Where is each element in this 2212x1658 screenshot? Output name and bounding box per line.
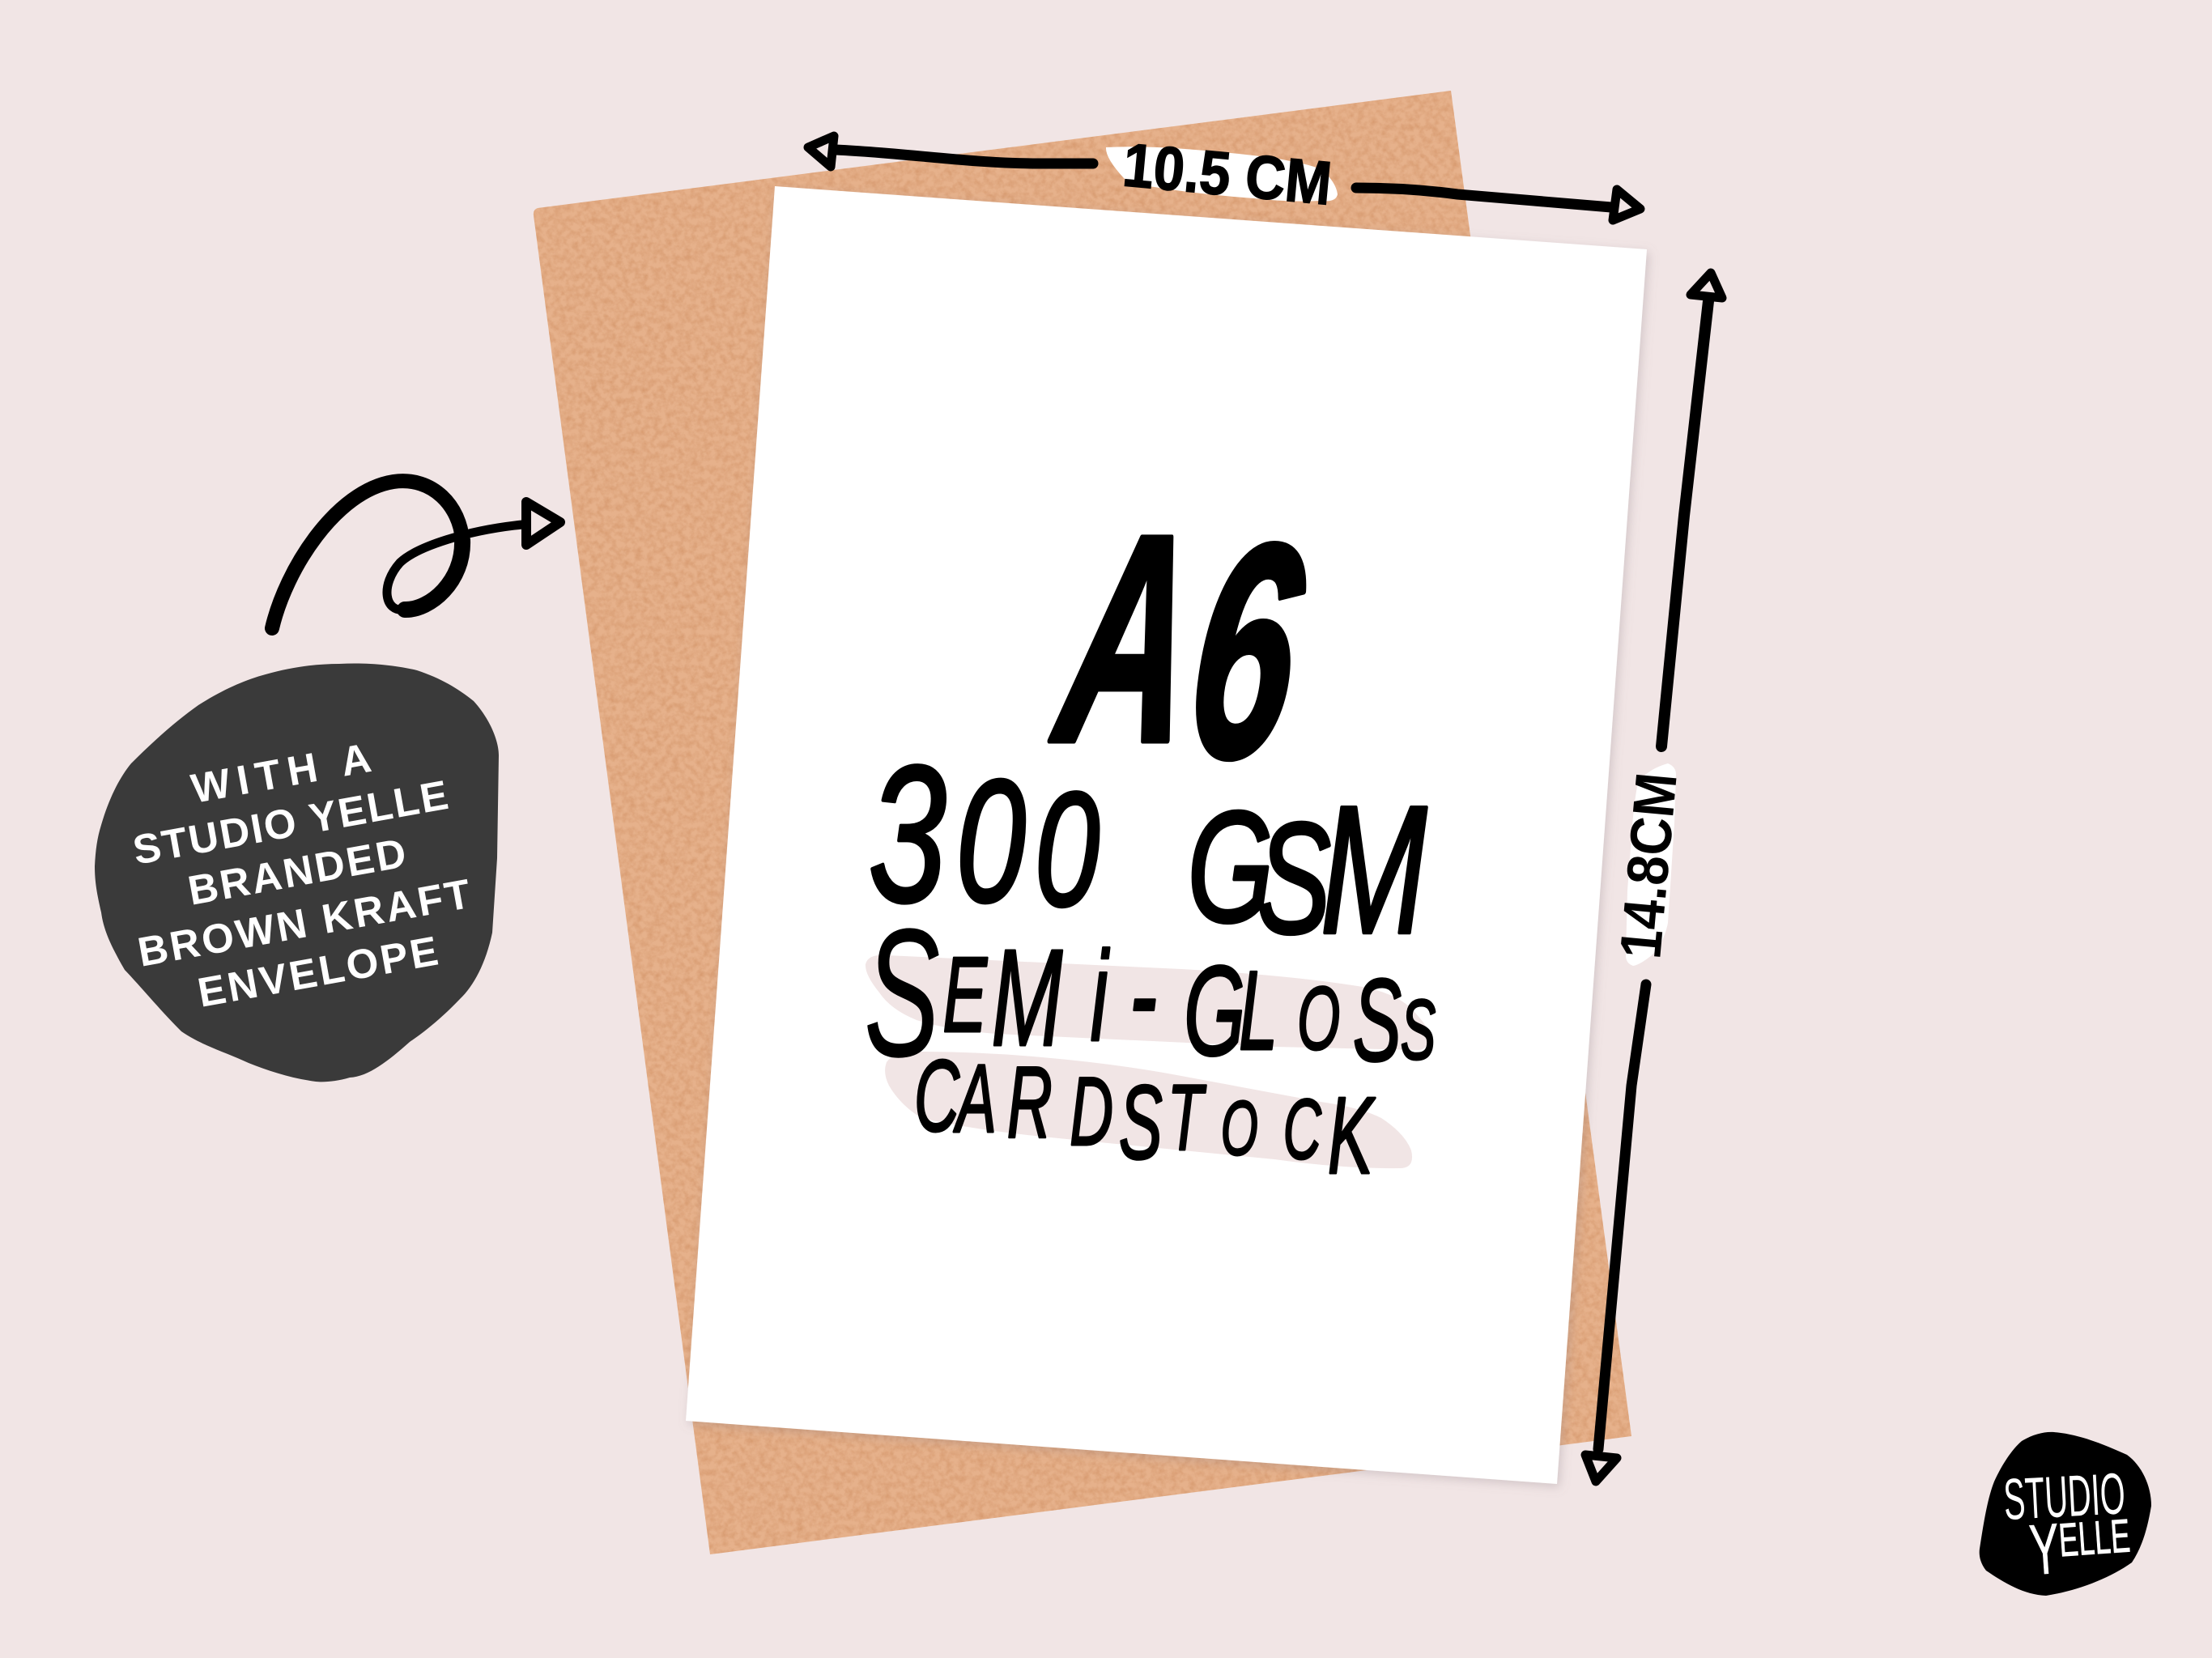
logo text: yelle: ELLE [2057, 1510, 2132, 1567]
badge line 4: BROWN KRAFT [134, 870, 474, 976]
arrowhead left [808, 136, 834, 167]
text: semi-gloss: S [865, 891, 940, 1095]
heading: GSM: G [1187, 779, 1274, 955]
curly arrow stroke [272, 481, 522, 628]
badge text [130, 734, 474, 1016]
arrow shaft top [1661, 301, 1708, 746]
kraft envelope [534, 91, 1631, 1554]
heading: GSM: S [1257, 790, 1331, 967]
height dimension arrow: 14.8 cm [1585, 273, 1722, 1482]
heading: 300: 3 [869, 726, 946, 943]
arrowhead right [1613, 189, 1640, 220]
arrow shaft left [834, 150, 1093, 164]
text: semi-gloss: G [1184, 939, 1245, 1082]
text: cardstock: A [953, 1045, 997, 1153]
brush swash behind cardstock [885, 1052, 1412, 1168]
label backing blob [1626, 763, 1676, 966]
logo: Studio Yelle [1980, 1432, 2151, 1596]
arrow shaft bottom [1598, 984, 1646, 1449]
text: cardstock: S [1119, 1063, 1163, 1181]
text: semi-gloss: - [1129, 920, 1157, 1069]
text: semi-gloss: i [1091, 925, 1110, 1068]
heading: 300: 0 [956, 743, 1026, 938]
arrowhead top [1691, 273, 1722, 298]
text: cardstock: R [1007, 1047, 1053, 1160]
curly arrow pointing to envelope [272, 481, 560, 628]
heading: A6: A [1040, 474, 1213, 804]
text: semi-gloss: E [942, 936, 988, 1055]
brush swash behind semi-gloss [866, 955, 1431, 1050]
text: semi-gloss: S [1401, 982, 1436, 1078]
badge: envelope note [95, 663, 499, 1082]
text: cardstock: D [1070, 1058, 1113, 1166]
logo blob [1980, 1432, 2151, 1596]
text: cardstock: C [1283, 1082, 1321, 1177]
badge line 1: WITH A [188, 734, 374, 812]
badge line 3: BRANDED [185, 830, 410, 914]
heading: 300: 0 [1035, 759, 1100, 939]
label backing blob [1106, 147, 1338, 202]
heading: A6: 6 [1174, 482, 1317, 822]
badge line 5: ENVELOPE [194, 928, 441, 1016]
text: cardstock: T [1168, 1066, 1207, 1170]
label: 10.5 CM: 10.5 CM [1120, 130, 1334, 219]
text: semi-gloss: M [991, 920, 1062, 1074]
curly arrow head [526, 502, 560, 545]
card lettering [865, 474, 1436, 1197]
dark blob [95, 663, 499, 1082]
text: semi-gloss: O [1297, 969, 1340, 1069]
text: semi-gloss: L [1239, 947, 1278, 1073]
label: 14.8CM: 14.8CM [1608, 770, 1690, 961]
text: cardstock: K [1328, 1073, 1376, 1197]
arrow shaft right [1356, 188, 1611, 207]
badge line 2: STUDIO YELLE [130, 772, 452, 874]
width dimension arrow: 10.5 cm [808, 130, 1640, 220]
text: semi-gloss: S [1353, 954, 1402, 1086]
logo text: yelle: Y [2027, 1508, 2062, 1590]
heading: GSM: M [1321, 768, 1427, 972]
arrowhead bottom [1585, 1455, 1617, 1482]
text: cardstock: O [1221, 1084, 1258, 1171]
text: cardstock: C [914, 1040, 960, 1154]
white A6 card [686, 186, 1647, 1484]
